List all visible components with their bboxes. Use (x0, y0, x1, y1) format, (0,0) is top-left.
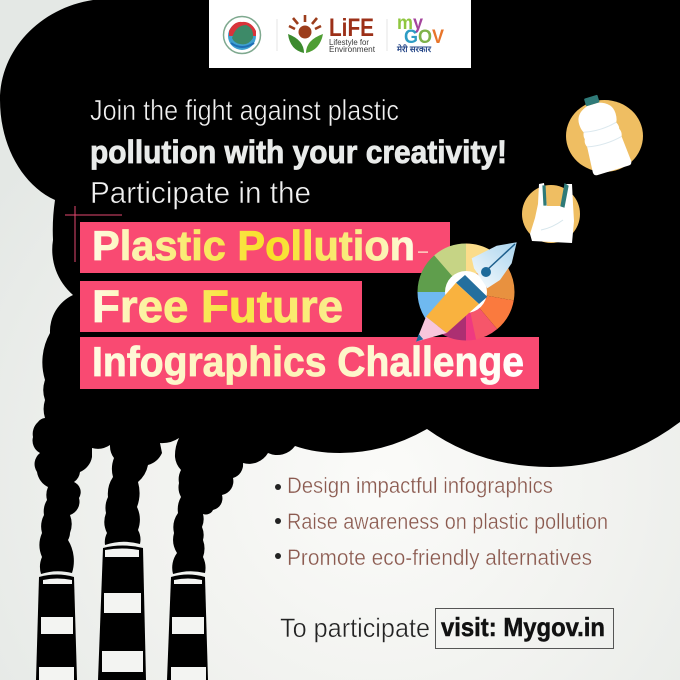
crosshair accent (65, 206, 122, 262)
logo: LiFE: LiFE (329, 14, 374, 42)
logo: MyGov (396, 13, 444, 54)
icon: plastic bottle (566, 91, 643, 176)
title box 1 (80, 222, 450, 273)
logo: ministry emblem (224, 16, 260, 54)
intro text (90, 95, 507, 210)
bullet 1: Design impactful infographics (287, 473, 553, 498)
icon: plastic bag (522, 183, 580, 243)
colour wheel (432, 258, 500, 326)
intro text: pollution with your creativity! (90, 134, 507, 170)
logo: LiFE: Lifestyle for (329, 38, 369, 47)
chimney: left (36, 574, 77, 680)
title box 2 (80, 281, 362, 332)
title line 1: Plastic Pollution (92, 222, 415, 269)
logo: MyGov: my (397, 13, 423, 34)
title hyphen (418, 252, 428, 253)
logo: MyGov: GOV (404, 27, 444, 48)
logo: LiFE (288, 14, 376, 54)
call to action (280, 608, 614, 648)
title box 3 (80, 337, 539, 389)
intro text: Participate in the (90, 175, 311, 210)
icon: colour wheel with pen and pencil (416, 242, 517, 342)
bullet list (275, 473, 608, 570)
pen nib (472, 242, 517, 288)
title line 2: Free Future (92, 281, 343, 332)
logo: MyGov: मेरी सरकार (396, 44, 432, 54)
intro text: Join the fight against plastic (90, 95, 399, 127)
bullet 3: Promote eco-friendly alternatives (287, 545, 592, 570)
pencil body (426, 283, 479, 333)
logo: LiFE: Environment (329, 45, 376, 54)
call to action: To participate (280, 613, 430, 643)
bullet 2: Raise awareness on plastic pollution (287, 509, 608, 534)
chimney: right (167, 574, 208, 680)
pencil tip (416, 317, 447, 342)
logo strip (209, 0, 471, 68)
divider lines (277, 19, 387, 51)
chimney: centre (98, 546, 146, 680)
challenge title (80, 222, 539, 389)
title line 3: Infographics Challenge (92, 338, 524, 385)
visit box: visit: Mygov.in (441, 612, 605, 642)
pencil ferrule (456, 275, 487, 304)
